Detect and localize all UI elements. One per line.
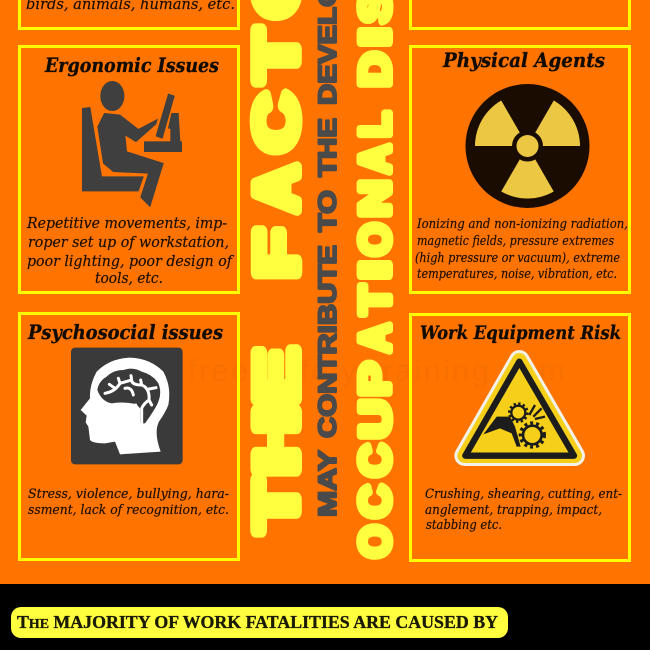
panel: biological hazards (cropped) bbox=[20, 0, 238, 28]
heading: psychosocial issues: Psychosocial issues bbox=[27, 320, 223, 344]
physical agents description: Ionizing and non-ionizing radiation, bbox=[416, 217, 628, 232]
vertical title: occupational diseases: I bbox=[352, 261, 400, 279]
panel: work equipment risk bbox=[410, 314, 630, 560]
psychosocial description bbox=[28, 487, 229, 518]
panel: psychosocial issues bbox=[20, 314, 238, 560]
vertical title: occupational diseases: C bbox=[352, 444, 400, 477]
vertical subtitle: may contribute to the development of: THE bbox=[314, 118, 342, 177]
banner: majority of work fatalities bbox=[11, 607, 508, 638]
watermark: free-safety-training.com bbox=[188, 353, 565, 388]
heading: work equipment risk: Work Equipment Risk bbox=[420, 322, 621, 344]
work equipment description: anglement, trapping, impact, bbox=[425, 503, 602, 518]
vertical title: the factors bbox=[243, 0, 310, 532]
work equipment description bbox=[425, 487, 622, 533]
panel: top right (cropped) bbox=[410, 0, 630, 28]
work equipment description: Crushing, shearing, cutting, ent- bbox=[425, 487, 622, 502]
vertical subtitle: may contribute to the development of: MAY bbox=[314, 450, 342, 517]
panel: ergonomic issues bbox=[20, 46, 238, 292]
vertical title: occupational diseases: N bbox=[352, 180, 400, 217]
vertical title: occupational diseases: T bbox=[352, 285, 400, 314]
banner: majority of work fatalities: THE MAJORITY OF WORK FATALITIES ARE CAUSED BY bbox=[17, 612, 498, 632]
vertical title: occupational diseases: U bbox=[352, 400, 400, 438]
vertical subtitle: may contribute to the development of bbox=[314, 0, 342, 517]
icon: crushing hazard triangle bbox=[465, 360, 575, 456]
ergonomic description bbox=[26, 216, 235, 287]
work equipment description: stabbing etc. bbox=[426, 518, 502, 533]
ergonomic description: roper set up of workstation, bbox=[28, 235, 229, 251]
vertical title: the factors: C bbox=[243, 93, 310, 152]
vertical title: occupational diseases: L bbox=[352, 111, 400, 138]
physical agents description: temperatures, noise, vibration, etc. bbox=[417, 267, 617, 282]
vertical title: the factors: T bbox=[243, 480, 310, 532]
vertical title: occupational diseases: A bbox=[352, 324, 400, 352]
vertical title: occupational diseases: C bbox=[352, 485, 400, 518]
physical agents description bbox=[415, 217, 628, 282]
ergonomic description: Repetitive movements, imp- bbox=[26, 216, 227, 232]
physical agents description: (high pressure or vacuum), extreme bbox=[415, 251, 620, 266]
psychosocial description: ssment, lack of recognition, etc. bbox=[28, 503, 229, 518]
vertical title: the factors: A bbox=[243, 165, 310, 212]
vertical title: occupational diseases: D bbox=[352, 52, 400, 87]
icon: radiation symbol bbox=[466, 84, 590, 208]
icon: person at workstation bbox=[82, 81, 182, 207]
vertical subtitle: may contribute to the development of: TO bbox=[314, 190, 342, 232]
vertical title: occupational diseases: O bbox=[352, 525, 400, 558]
vertical title: occupational diseases bbox=[352, 0, 400, 558]
psychosocial description: Stress, violence, bullying, hara- bbox=[28, 487, 229, 502]
icon: head with brain bbox=[71, 348, 183, 464]
vertical title: occupational diseases: O bbox=[352, 223, 400, 256]
heading: ergonomic issues: Ergonomic Issues bbox=[44, 53, 219, 77]
black footer band bbox=[0, 584, 650, 650]
physical agents description: magnetic fields, pressure extremes bbox=[417, 234, 614, 249]
ergonomic description: tools, etc. bbox=[95, 271, 163, 287]
vertical title: occupational diseases: P bbox=[352, 362, 400, 396]
vertical title: the factors: F bbox=[243, 229, 310, 278]
vertical title: the factors: H bbox=[243, 406, 310, 475]
vertical title: the factors: E bbox=[243, 348, 310, 404]
panel: physical agents bbox=[410, 46, 630, 292]
heading: physical agents: Physical Agents bbox=[442, 48, 605, 72]
vertical title: occupational diseases: A bbox=[352, 144, 400, 174]
vertical title: occupational diseases: I bbox=[352, 28, 400, 46]
vertical title: the factors: T bbox=[243, 30, 310, 82]
vertical subtitle: may contribute to the development of: CONTRIBUTE bbox=[314, 245, 342, 438]
ergonomic description: poor lighting, poor design of bbox=[27, 254, 235, 270]
